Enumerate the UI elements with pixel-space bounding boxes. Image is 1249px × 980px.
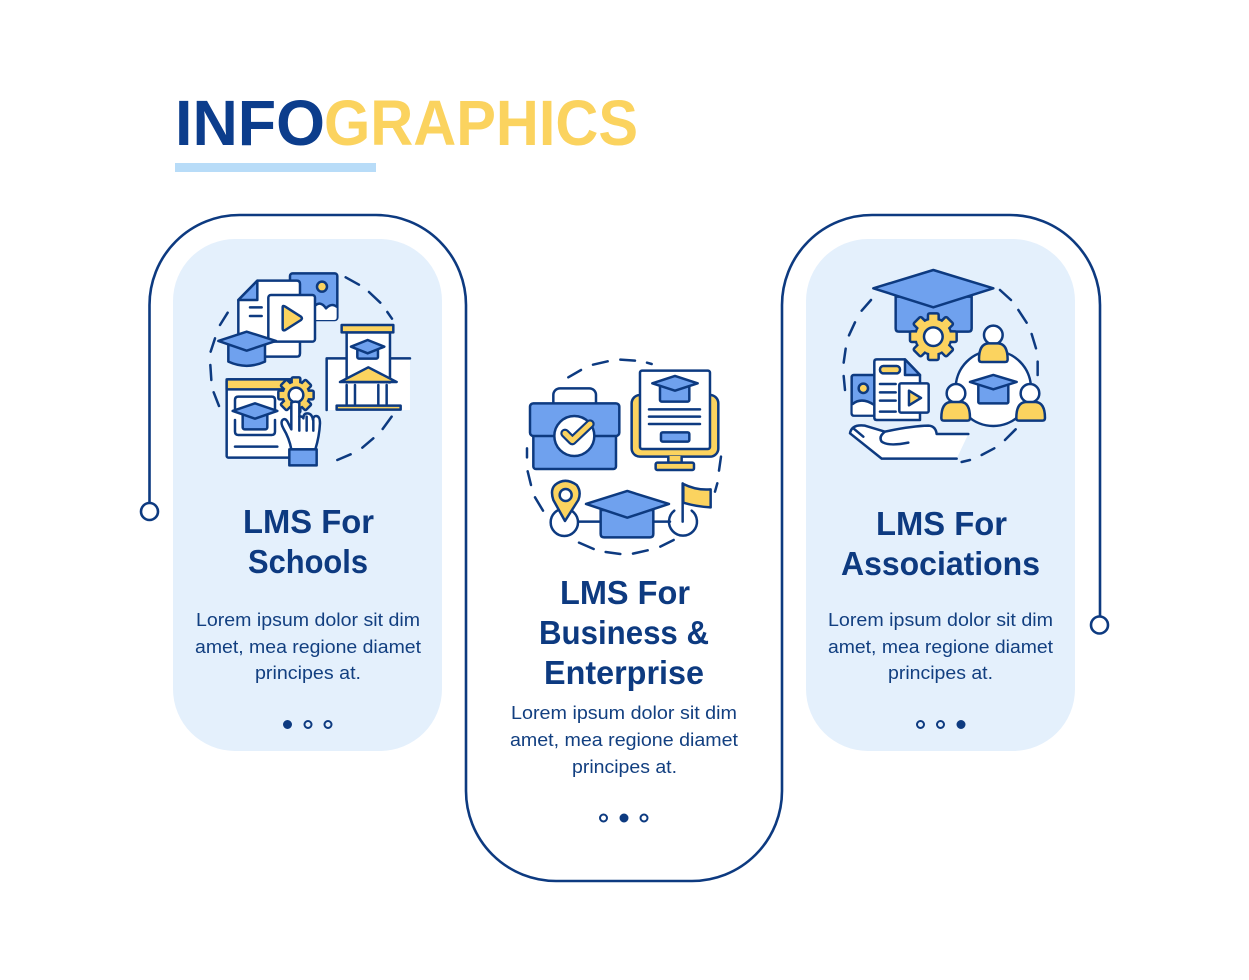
title: INFOGRAPHICS: INFO xyxy=(175,87,325,159)
heading: LMS For Schools: Schools xyxy=(248,543,368,580)
icon: school LMS xyxy=(210,273,410,465)
body text xyxy=(510,702,738,777)
heading: LMS For Schools xyxy=(243,503,374,580)
heading: LMS For Schools: LMS For xyxy=(243,503,374,540)
heading: LMS For Associations: LMS For xyxy=(876,505,1007,542)
heading: LMS For Business & Enterprise: LMS For xyxy=(560,574,690,611)
panel: LMS for schools xyxy=(173,239,442,751)
connector outline with end nodes xyxy=(141,215,1108,881)
title: INFOGRAPHICS xyxy=(175,87,638,159)
title underline xyxy=(175,163,376,172)
panel background xyxy=(806,239,1075,751)
body text: amet, mea regione diamet xyxy=(828,636,1053,657)
panel: LMS for business and enterprise xyxy=(510,360,738,822)
icon: business LMS xyxy=(527,360,721,554)
body text: principes at. xyxy=(572,756,677,777)
icon: associations LMS xyxy=(844,270,1045,462)
heading: LMS For Associations: Associations xyxy=(841,545,1040,582)
body text: Lorem ipsum dolor sit dim xyxy=(828,609,1053,630)
heading: LMS For Business & Enterprise: Enterprise xyxy=(544,654,704,691)
title: INFOGRAPHICS: GRAPHICS xyxy=(324,87,638,159)
pagination dots xyxy=(600,814,648,822)
body text xyxy=(195,609,421,683)
panel: LMS for associations xyxy=(806,239,1075,751)
heading: LMS For Business & Enterprise: Business & xyxy=(539,614,709,651)
pagination dots xyxy=(284,721,332,728)
body text: amet, mea regione diamet xyxy=(510,729,738,750)
pagination dots xyxy=(917,721,964,728)
body text: amet, mea regione diamet xyxy=(195,636,421,657)
heading: LMS For Business & Enterprise xyxy=(539,574,709,691)
body text: principes at. xyxy=(888,662,993,683)
body text: Lorem ipsum dolor sit dim xyxy=(196,609,420,630)
panel background xyxy=(173,239,442,751)
heading: LMS For Associations xyxy=(841,505,1040,582)
body text: Lorem ipsum dolor sit dim xyxy=(511,702,737,723)
body text: principes at. xyxy=(255,662,361,683)
body text xyxy=(828,609,1053,683)
